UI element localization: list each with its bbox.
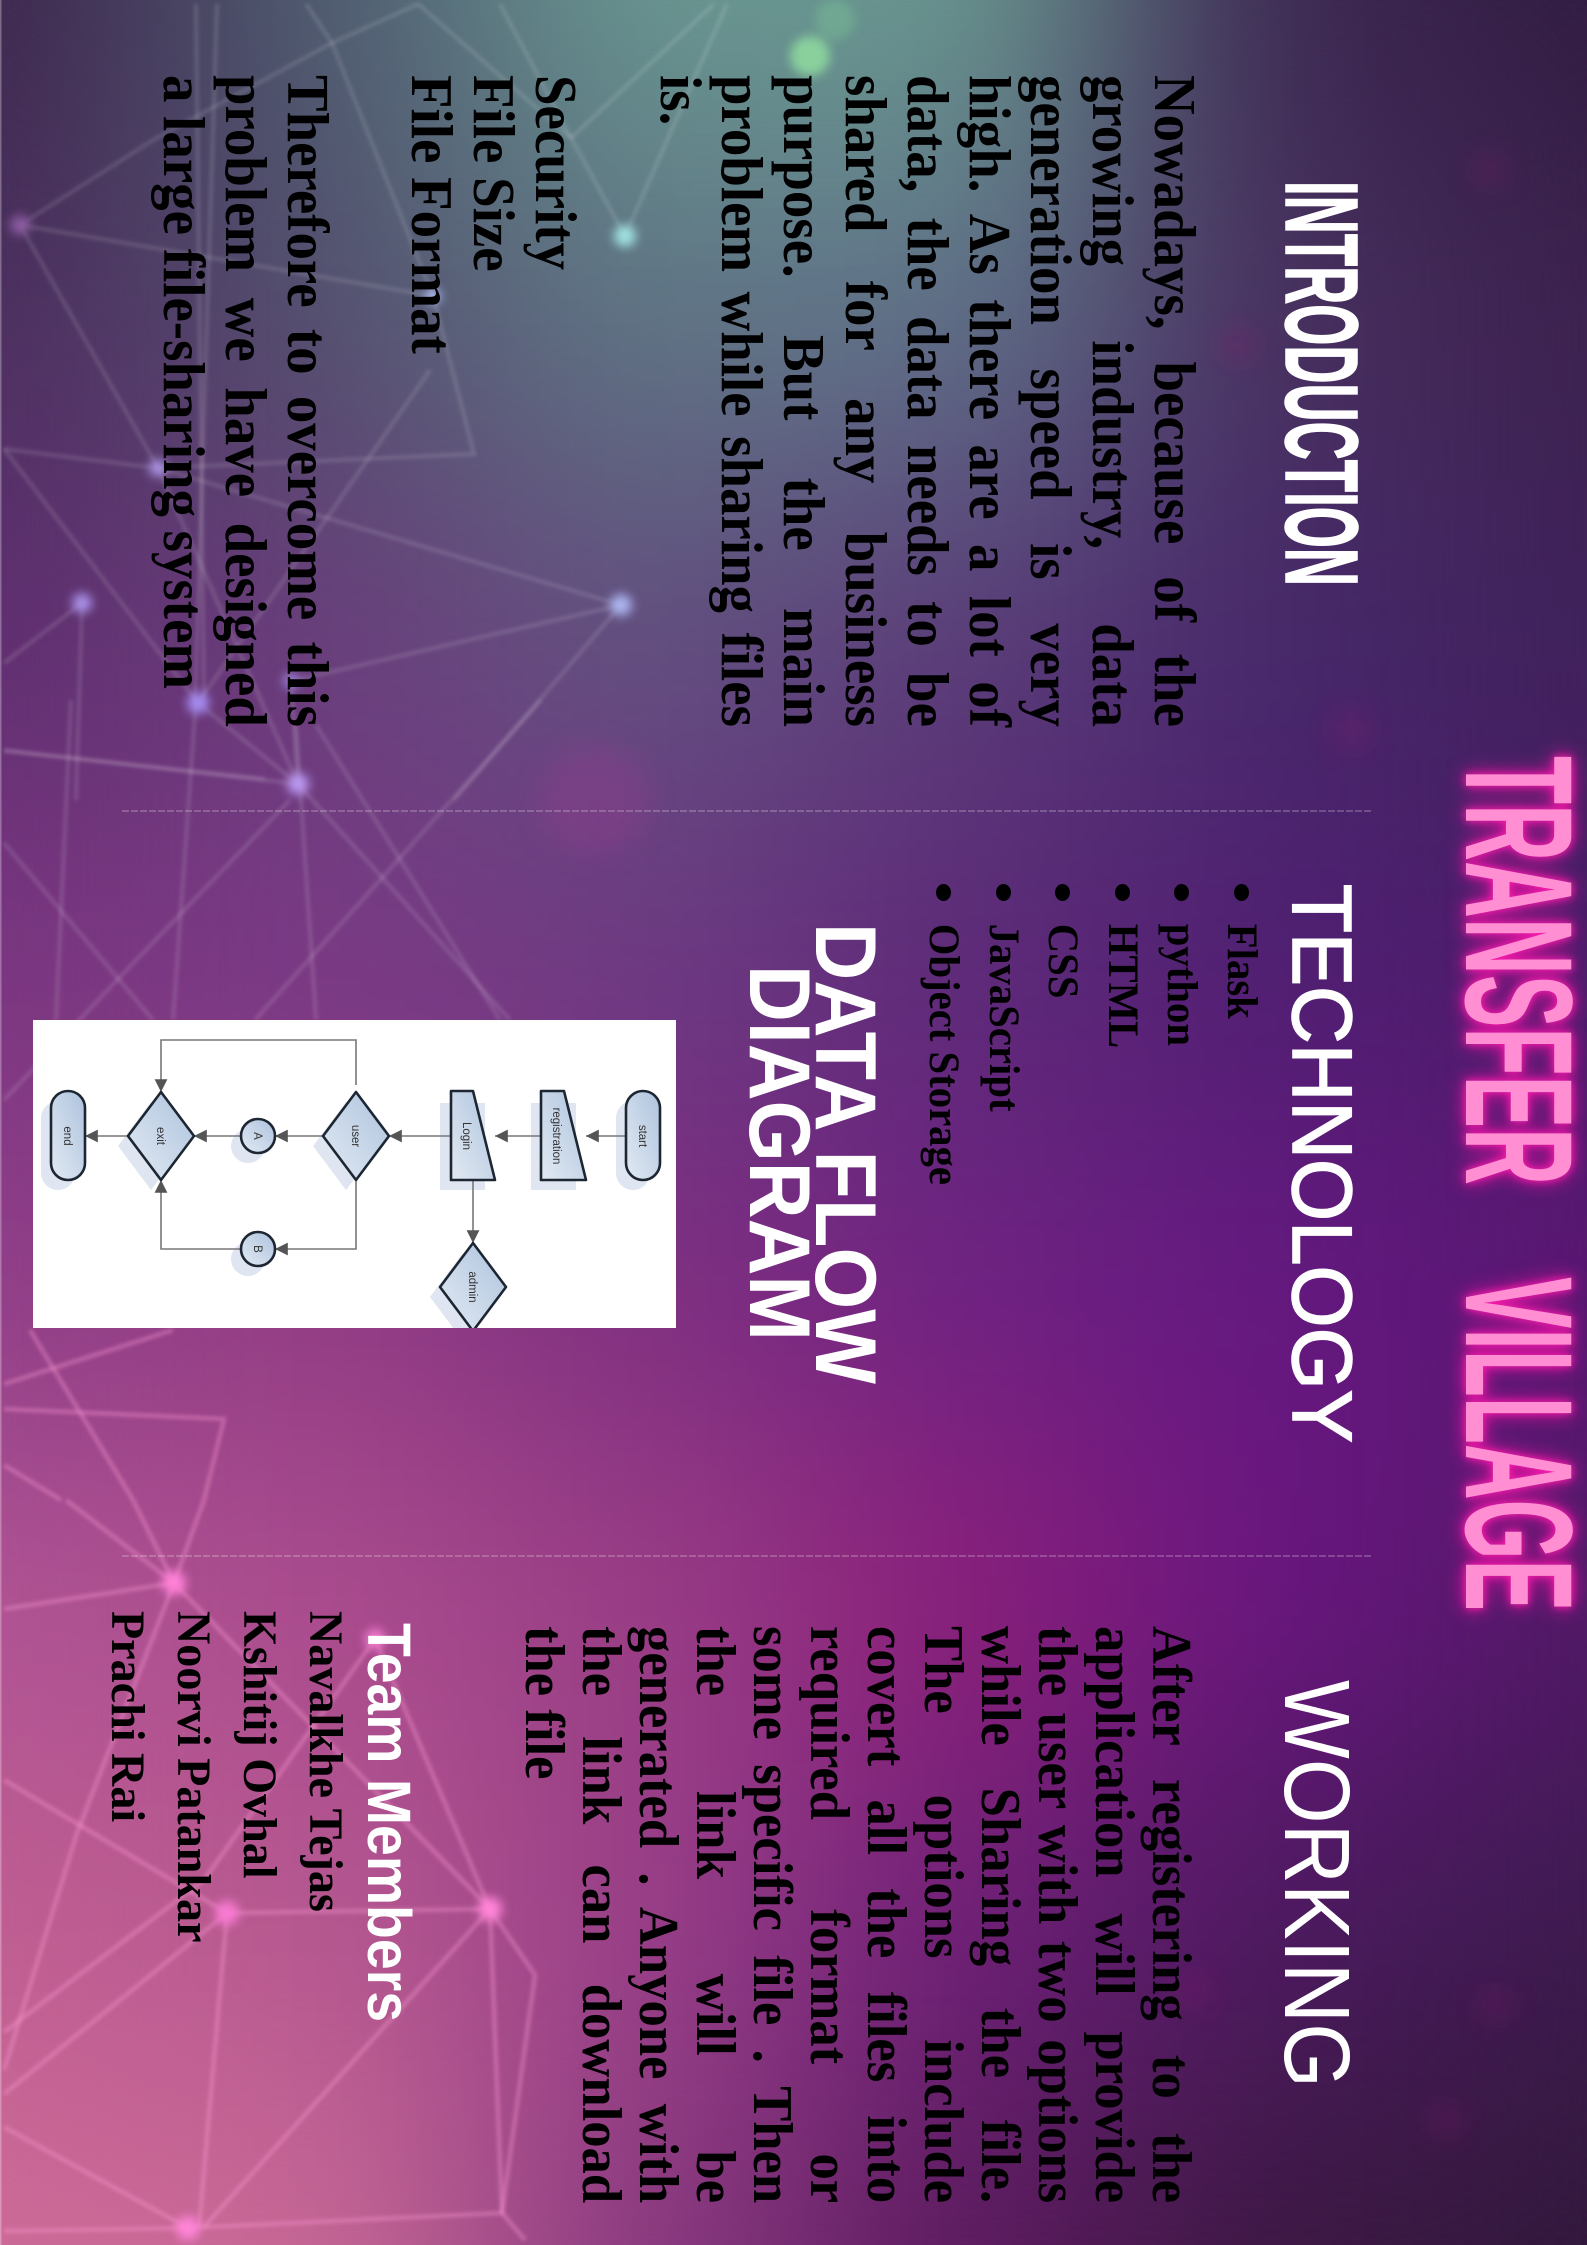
text block: working paragraph: the user with two options [1026,1626,1088,2203]
chart: data flow diagram: user [349,1125,361,1147]
text block: team member names: Navalkhe Tejas [299,1611,352,1912]
heading line: diagram: DIAGRAM [731,965,827,1341]
chart: data flow diagram: start [636,1125,648,1148]
list: technologies: HTML [1099,924,1146,1048]
list: technologies: JavaScript [980,924,1027,1112]
chart: data flow diagram: exit [154,1127,166,1146]
chart: data flow diagram: B [251,1245,263,1253]
text block: intro paragraph: problem while sharing files [709,75,775,727]
text block: intro paragraph: data, the data needs to be [895,75,961,727]
text block: working paragraph: while Sharing the file. [969,1626,1031,2203]
text block: problems list: File Format [399,75,465,354]
list: technologies: Flask [1218,924,1265,1019]
text block: working paragraph: required format or [798,1626,860,2203]
list: technologies: Object Storage [920,924,968,1185]
text block: working paragraph: the link will be [684,1626,746,2203]
text block: conclusion: problem we have designed [213,75,279,727]
text block: intro paragraph: high. As there are a lot of [957,75,1023,727]
list: technologies [920,884,1265,1185]
title: Transfer Village [1433,743,1587,1622]
text block: intro paragraph: purpose. But the main [771,75,837,727]
text block: conclusion: a large file-sharing system [151,75,217,689]
text block: working paragraph: the link can download [570,1626,632,2203]
text block: conclusion: Therefore to overcome this [275,75,341,727]
text block: team member names: Kshitij Ovhal [233,1611,286,1879]
heading line: data flow: DATA FLOW [797,923,893,1385]
text block: working paragraph [513,1626,1202,2203]
heading: working: WORKING [1265,1680,1369,2088]
chart: data flow diagram: Login [460,1122,472,1150]
text block: working paragraph: After registering to the [1140,1626,1202,2203]
text block: working paragraph: the file [513,1626,575,1779]
text block: working paragraph: generated . Anyone with [627,1626,689,2203]
chart: data flow diagram: registration [550,1108,562,1164]
text block: intro paragraph: is. [648,75,714,125]
text block: intro paragraph: shared for any business [833,75,899,727]
chart: data flow diagram: end [61,1126,73,1146]
text block: working paragraph: The options include [912,1626,974,2203]
chart: data flow diagram [33,1020,676,1328]
heading: data flow diagram [731,923,893,1385]
panel: introduction [151,75,1379,728]
heading: introduction: INTRODUCTION [1264,181,1379,586]
text block: team member names [101,1611,352,1942]
text block: problems list [399,75,589,354]
chart: data flow diagram: admin [466,1271,478,1303]
list: technologies: CSS [1040,924,1086,998]
text block: intro paragraph [648,75,1208,728]
text block: team member names: Prachi Rai [101,1611,154,1822]
text block: problems list: Security [523,75,589,270]
panel: working and team members [101,1611,1369,2203]
text block: working paragraph: some specific file . Then [741,1626,803,2203]
panel: technology and data flow [33,884,1369,1443]
text block: problems list: File Size [461,75,527,272]
text block: intro paragraph: generation speed is very [1018,75,1084,727]
list: technologies: python [1158,924,1206,1046]
chart: data flow diagram: A [251,1132,263,1140]
text block: intro paragraph: growing industry, data [1080,75,1146,727]
text block: team member names: Noorvi Patankar [167,1611,220,1942]
text block: working paragraph: covert all the files into [855,1626,917,2203]
text block: intro paragraph: Nowadays, because of the [1142,75,1208,727]
text block: working paragraph: application will provide [1083,1626,1145,2203]
heading: technology: TECHNOLOGY [1275,884,1369,1443]
text block: conclusion [151,75,341,727]
heading: team members: Team Members [355,1623,423,2022]
